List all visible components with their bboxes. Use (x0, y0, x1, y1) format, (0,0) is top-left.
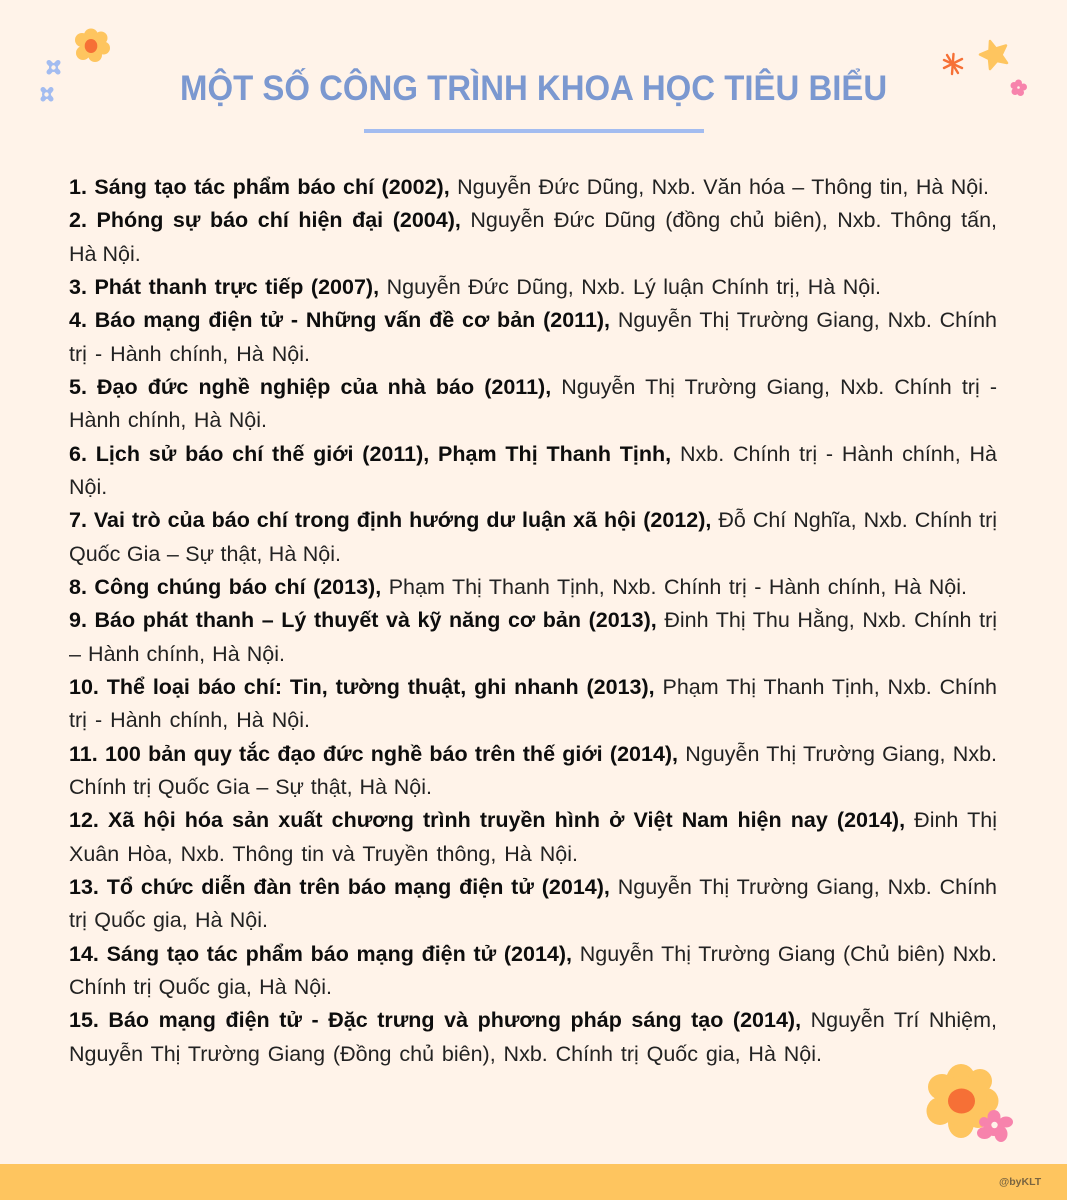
entry 2 (69, 208, 997, 266)
entry 11: 11. 100 bản quy tắc đạo đức nghề báo trên thế giới (2014), Nguyễn Thị Trường Giang, Nxb. (69, 742, 997, 766)
entry 7 (69, 508, 997, 566)
entry 13: trị Quốc gia, Hà Nội. (69, 908, 268, 932)
entry 10: trị - Hành chính, Hà Nội. (69, 708, 310, 732)
entry 6: Nội. (69, 475, 107, 499)
entry 4: 4. Báo mạng điện tử - Những vấn đề cơ bản (2011), Nguyễn Thị Trường Giang, Nxb. Chính (69, 308, 997, 332)
entry 4 (69, 308, 997, 366)
entry 4: trị - Hành chính, Hà Nội. (69, 342, 310, 366)
credit text: @byKLT (999, 1176, 1041, 1188)
entry 5: Hành chính, Hà Nội. (69, 408, 267, 432)
title underline (364, 129, 704, 133)
entry 11 (69, 742, 997, 799)
entry 14: 14. Sáng tạo tác phẩm báo mạng điện tử (2014), Nguyễn Thị Trường Giang (Chủ biên) Nxb. (69, 942, 997, 966)
icon: pink flower top right (1010, 80, 1027, 96)
entry 12 (69, 808, 997, 866)
entry 10: 10. Thể loại báo chí: Tin, tường thuật, ghi nhanh (2013), Phạm Thị Thanh Tịnh, Nxb. Chính (69, 675, 997, 699)
entry 15: Nguyễn Thị Trường Giang (Đồng chủ biên), Nxb. Chính trị Quốc gia, Hà Nội. (69, 1042, 822, 1066)
entry 14 (69, 942, 997, 999)
icon: pink flower bottom right (977, 1110, 1013, 1142)
icon: orange asterisk (942, 52, 964, 76)
entry 7: 7. Vai trò của báo chí trong định hướng dư luận xã hội (2012), Đỗ Chí Nghĩa, Nxb. Chính trị (69, 508, 997, 532)
entry 5 (69, 375, 997, 432)
entry 15: 15. Báo mạng điện tử - Đặc trưng và phương pháp sáng tạo (2014), Nguyễn Trí Nhiệm, (69, 1008, 997, 1032)
title: MỘT SỐ CÔNG TRÌNH KHOA HỌC TIÊU BIỂU (180, 69, 887, 108)
entry 9: 9. Báo phát thanh – Lý thuyết và kỹ năng cơ bản (2013), Đinh Thị Thu Hằng, Nxb. Chính trị (69, 608, 997, 632)
entry 13 (69, 874, 997, 932)
entry 1: 1. Sáng tạo tác phẩm báo chí (2002), Nguyễn Đức Dũng, Nxb. Văn hóa – Thông tin, Hà Nội. (69, 175, 989, 199)
icon: large orange flower bottom right (926, 1064, 998, 1138)
icon: small blue flower upper (46, 60, 60, 74)
entry 7: Quốc Gia – Sự thật, Hà Nội. (69, 542, 341, 566)
icon: yellow star (978, 40, 1008, 70)
entry 12: Xuân Hòa, Nxb. Thông tin và Truyền thông, Hà Nội. (69, 842, 578, 866)
entry 13: 13. Tổ chức diễn đàn trên báo mạng điện tử (2014), Nguyễn Thị Trường Giang, Nxb. Chính (69, 875, 997, 899)
entry 9 (69, 608, 997, 666)
entry 8: 8. Công chúng báo chí (2013), Phạm Thị Thanh Tịnh, Nxb. Chính trị - Hành chính, Hà Nội. (69, 575, 967, 599)
entry 14: Chính trị Quốc gia, Hà Nội. (69, 975, 332, 999)
text block: list of scientific works (69, 175, 997, 1066)
entry 10 (69, 675, 997, 732)
entry 2: Hà Nội. (69, 242, 141, 266)
entry 12: 12. Xã hội hóa sản xuất chương trình truyền hình ở Việt Nam hiện nay (2014), Đinh Thị (69, 808, 997, 832)
icon: small blue flower lower (40, 87, 54, 102)
entry 2: 2. Phóng sự báo chí hiện đại (2004), Nguyễn Đức Dũng (đồng chủ biên), Nxb. Thông tấn, (69, 208, 997, 232)
entry 6 (69, 442, 997, 499)
footer bar (0, 1164, 1067, 1200)
entry 5: 5. Đạo đức nghề nghiệp của nhà báo (2011), Nguyễn Thị Trường Giang, Nxb. Chính trị - (69, 375, 997, 399)
entry 6: 6. Lịch sử báo chí thế giới (2011), Phạm Thị Thanh Tịnh, Nxb. Chính trị - Hành chính, Hà (69, 442, 997, 466)
icon: orange flower top left (75, 28, 110, 62)
entry 9: – Hành chính, Hà Nội. (69, 642, 285, 666)
entry 15 (69, 1008, 997, 1066)
entry 11: Chính trị Quốc Gia – Sự thật, Hà Nội. (69, 775, 432, 799)
entry 3: 3. Phát thanh trực tiếp (2007), Nguyễn Đức Dũng, Nxb. Lý luận Chính trị, Hà Nội. (69, 275, 881, 299)
